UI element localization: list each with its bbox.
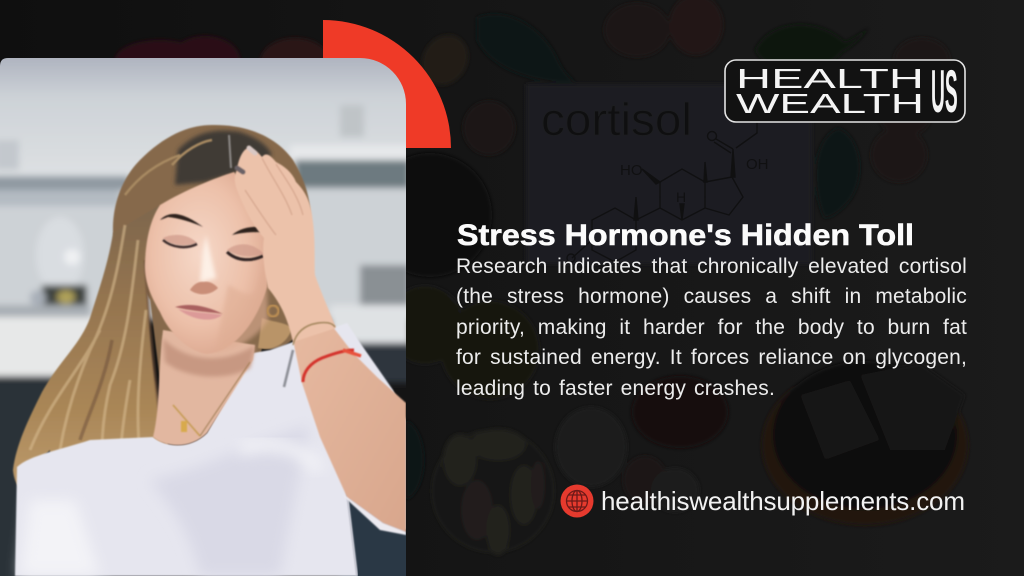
face bbox=[145, 172, 268, 354]
website link with globe icon: healthiswealthsupplements.com bbox=[601, 486, 965, 516]
logo: Health is Wealth US: HEALTH bbox=[736, 63, 924, 94]
arm and hand bbox=[235, 148, 406, 535]
heading: Stress Hormone's Hidden Toll bbox=[457, 219, 914, 252]
earring bbox=[268, 306, 278, 316]
cortisol word on card: cortisol bbox=[541, 94, 692, 145]
necklace bbox=[173, 362, 250, 436]
body text: leading to faster energy crashes. bbox=[456, 377, 775, 400]
body text bbox=[456, 255, 967, 400]
photo panel: woman with hand on forehead bbox=[0, 58, 406, 576]
cortisol molecule diagram: H bbox=[676, 189, 686, 205]
icon: globe bbox=[560, 484, 594, 518]
cortisol molecule diagram bbox=[567, 121, 768, 262]
logo: Health is Wealth US: US bbox=[931, 59, 958, 125]
body text: priority, making it harder for the body to burn fat bbox=[456, 316, 967, 339]
body text: Research indicates that chronically elevated cortisol bbox=[456, 255, 967, 278]
body text: for sustained energy. It forces reliance on glycogen, bbox=[456, 346, 967, 369]
cortisol molecule diagram: OH bbox=[746, 156, 768, 173]
neck bbox=[153, 330, 255, 445]
hair bbox=[13, 125, 310, 518]
kitchen background bbox=[0, 50, 420, 576]
t-shirt bbox=[15, 323, 406, 576]
logo: Health is Wealth US: WEALTH bbox=[736, 88, 924, 119]
body text: (the stress hormone) causes a shift in metabolic bbox=[456, 285, 967, 308]
cortisol molecule diagram: HO bbox=[620, 162, 642, 179]
bracelets and pendant bbox=[284, 322, 361, 387]
